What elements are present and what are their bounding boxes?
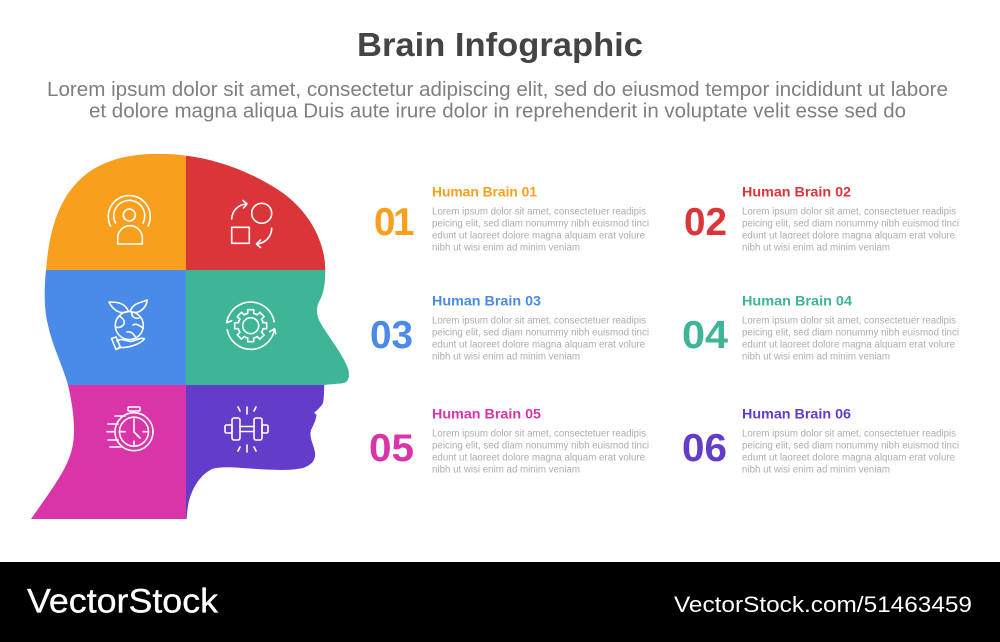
- title: Brain Infographic: [357, 27, 643, 64]
- body 04: [742, 316, 959, 362]
- body 02: Lorem ipsum dolor sit amet, consectetuer readipis: [742, 206, 956, 218]
- body 06: edunt ut laoreet dolore magna alquam erat volure: [742, 452, 955, 464]
- body 01: nibh ut wisi enim ad minim veniam: [432, 242, 580, 254]
- subtitle text: Lorem ipsum dolor sit amet, consectetur adipiscing elit, sed do eiusmod tempor incididunt ut labore: [47, 79, 948, 101]
- subtitle text: [47, 79, 948, 123]
- heading 02: Human Brain 02: [742, 184, 851, 200]
- body 03: Lorem ipsum dolor sit amet, consectetuer readipis: [432, 316, 646, 326]
- segment: teal: [186, 270, 366, 385]
- item 02: [684, 184, 959, 254]
- body 02: edunt ut laoreet dolore magna alquam erat volure: [742, 230, 955, 242]
- heading 05: Human Brain 05: [432, 406, 541, 422]
- body 04: edunt ut laoreet dolore magna alquam erat volure: [742, 340, 955, 350]
- number 05: 05: [369, 427, 414, 470]
- item 05: [369, 406, 649, 476]
- body 03: [432, 316, 649, 362]
- heading 04: Human Brain 04: [742, 293, 852, 309]
- number 04: 04: [682, 314, 729, 357]
- footer logo: VectorStock: [27, 582, 219, 620]
- icon: stopwatch: [107, 407, 153, 451]
- body 01: peicing elit, sed diam nonummy nibh euismod tinci: [432, 218, 649, 230]
- body 03: nibh ut wisi enim ad minim veniam: [432, 352, 580, 362]
- number 03: 03: [370, 314, 413, 357]
- icon: globe with leaves and hand: [109, 300, 147, 350]
- icon: gear with cycle arrows: [227, 302, 276, 349]
- body 04: nibh ut wisi enim ad minim veniam: [742, 352, 890, 362]
- item 04: [682, 293, 959, 362]
- heading 06: Human Brain 06: [742, 406, 851, 422]
- body 06: peicing elit, sed diam nonummy nibh euismod tinci: [742, 440, 959, 452]
- body 05: peicing elit, sed diam nonummy nibh euismod tinci: [432, 440, 649, 452]
- segment: orange: [46, 154, 186, 270]
- body 06: nibh ut wisi enim ad minim veniam: [742, 464, 890, 476]
- body 02: peicing elit, sed diam nonummy nibh euismod tinci: [742, 218, 959, 230]
- number 06: 06: [682, 427, 727, 470]
- segment: magenta: [31, 385, 186, 519]
- subtitle text: et dolore magna aliqua Duis aute irure dolor in reprehenderit in voluptate velit esse sed do: [89, 101, 906, 123]
- body 06: Lorem ipsum dolor sit amet, consectetuer readipis: [742, 428, 956, 440]
- body 03: peicing elit, sed diam nonummy nibh euismod tinci: [432, 328, 649, 338]
- number 01: 01: [374, 201, 414, 244]
- body 02: nibh ut wisi enim ad minim veniam: [742, 242, 890, 254]
- footer image id: VectorStock.com/51463459: [674, 592, 972, 617]
- body 01: Lorem ipsum dolor sit amet, consectetuer readipis: [432, 206, 646, 218]
- body 05: edunt ut laoreet dolore magna alquam erat volure: [432, 452, 645, 464]
- body 05: [432, 428, 649, 476]
- body 01: edunt ut laoreet dolore magna alquam erat volure: [432, 230, 645, 242]
- segment: red: [186, 156, 326, 270]
- icon: person with signal: [108, 196, 150, 244]
- item 03: [370, 293, 649, 362]
- body 04: Lorem ipsum dolor sit amet, consectetuer readipis: [742, 316, 956, 326]
- body 01: [432, 206, 649, 254]
- body 02: [742, 206, 959, 254]
- segment: blue: [44, 270, 186, 385]
- icon: dumbbell: [225, 407, 268, 452]
- footer bar: [0, 562, 1000, 642]
- item 06: [682, 406, 959, 476]
- heading 01: Human Brain 01: [432, 184, 537, 200]
- body 03: edunt ut laoreet dolore magna alquam erat volure: [432, 340, 645, 350]
- icon: shapes with arrows: [232, 200, 272, 248]
- heading 03: Human Brain 03: [432, 293, 541, 309]
- body 04: peicing elit, sed diam nonummy nibh euismod tinci: [742, 328, 959, 338]
- item 01: [374, 184, 649, 254]
- head silhouette: [31, 154, 349, 519]
- segment: purple: [186, 385, 324, 519]
- body 05: nibh ut wisi enim ad minim veniam: [432, 464, 580, 476]
- body 06: [742, 428, 959, 476]
- number 02: 02: [684, 201, 727, 244]
- body 05: Lorem ipsum dolor sit amet, consectetuer readipis: [432, 428, 646, 440]
